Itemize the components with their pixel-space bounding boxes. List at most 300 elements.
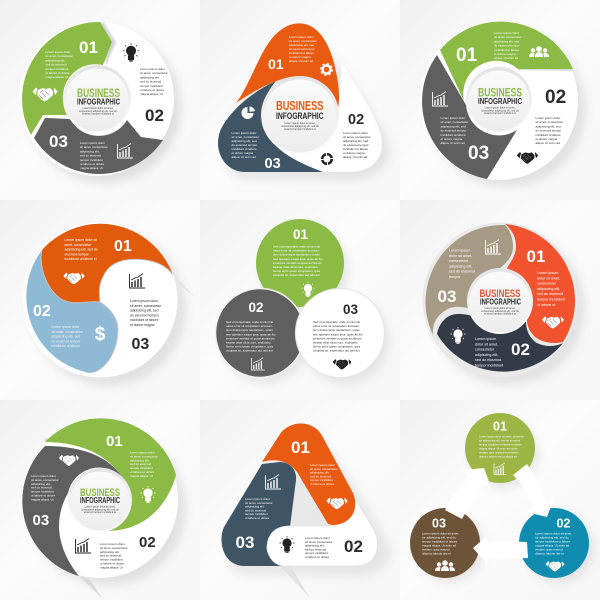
icon: chart	[266, 474, 281, 489]
03: 03	[264, 156, 281, 172]
icon: dollar: $	[95, 324, 106, 345]
text 02: do eiusmod tempor	[536, 129, 561, 133]
text 01: tempor incididunt	[130, 466, 153, 470]
text 03: sed do eiusmod	[449, 270, 475, 274]
text 02: magna aliqua. Ut enim ad	[535, 544, 570, 548]
text 02: Lorem ipsum dolor	[305, 536, 330, 540]
text 02: Lorem ipsum dolor sit amet,	[535, 532, 572, 536]
panel: swirl orange blue	[22, 222, 196, 386]
segment 03 navy	[218, 81, 323, 172]
text 02: tempor incididunt	[305, 551, 328, 555]
text 01: incididunt ut labore et	[64, 257, 97, 261]
text 02: voluptas sit, aspernatur aut odit aut	[226, 349, 273, 353]
segment 02 blue	[26, 250, 118, 373]
panel: rounded triangle orange navy	[218, 23, 390, 180]
text 02: tempor incididunt ut labore	[535, 540, 571, 544]
center title: eiusmod tempor incididunt ut	[484, 313, 516, 316]
text 01: do eiusmod tempor	[289, 47, 315, 51]
text 03: do eiusmod tempor	[130, 313, 160, 317]
text 02: Lorem ipsum	[475, 337, 496, 341]
01: 01	[526, 247, 545, 266]
text 01: consectetur	[537, 282, 557, 286]
circle 03 white	[296, 288, 384, 378]
center title: BUSINESS	[478, 88, 522, 100]
text 02: Lorem ipsum dolor	[140, 67, 165, 71]
text 03: Lorem ipsum dolor	[130, 299, 159, 303]
text 02: do eiusmod tempor	[343, 143, 369, 147]
text 02: sit amet, consectetur	[52, 330, 84, 334]
text 03: adipisicing elit,	[80, 149, 100, 153]
02: 02	[556, 516, 570, 530]
text 02: tempor incididunt	[140, 84, 163, 88]
icon: chart	[252, 358, 265, 370]
text 01: do eiusmod tempor	[494, 44, 520, 48]
center title: Lorem ipsum dolor sit amet,	[85, 506, 116, 508]
segment 03 navy	[222, 462, 296, 566]
icon: handshake	[542, 316, 564, 329]
03: 03	[236, 533, 254, 552]
icon: handshake	[326, 497, 348, 509]
arrow: 03 to 01	[445, 468, 492, 519]
panel: three circles with arrows	[410, 413, 594, 583]
text 02: Lorem ipsum dolor	[343, 131, 368, 135]
text 01: sit amet, consectetur	[310, 467, 338, 471]
center title: INFOGRAPHIC	[276, 111, 324, 121]
text 01: ut labore et dolore	[130, 470, 155, 474]
text 03: ut labore et dolore	[245, 516, 270, 520]
text 01: inventore veritatis et quasi architecto	[273, 261, 322, 265]
text 01: adipisicing elit,	[310, 471, 330, 475]
circle 01 green	[256, 219, 344, 307]
icon: pie	[242, 106, 255, 119]
icon: bulb	[140, 486, 156, 503]
text 03: tur adipisicing elit, sed do	[422, 536, 456, 540]
center circle	[261, 76, 339, 154]
text 01: sit amet, consectetur	[494, 35, 522, 39]
circle 02 blue	[519, 508, 589, 578]
text 03: adipiscing elit,	[449, 264, 472, 268]
text 03: et dolore magna	[440, 137, 463, 141]
text 01: tempor incididunt	[46, 67, 69, 71]
text 01: ut labore et dolore	[310, 482, 335, 486]
text 01: Lorem ipsum dolor	[310, 463, 335, 467]
text 02: beatae vitae dicta sunt, explicabo.	[226, 340, 271, 344]
segment 03 grey	[422, 55, 517, 179]
text 02: tur adipisicing elit, sed do	[535, 536, 569, 540]
text 01: Lorem ipsum dolor	[46, 50, 70, 54]
02: 02	[139, 534, 156, 551]
center title: INFOGRAPHIC	[480, 296, 521, 306]
text 02: sit amet, consectetur	[536, 120, 563, 124]
text 01: Lorem ipsum	[537, 271, 558, 275]
text 03: sit amet, consectetur	[245, 501, 273, 505]
arrow: 01 to 02	[513, 464, 554, 517]
text 02: tempor incididunt	[475, 364, 503, 368]
text 03: Lorem ipsum dolor	[31, 474, 56, 478]
text 02: sed do eiusmod	[100, 554, 122, 558]
text 02: do eiusmod tempor	[52, 339, 81, 343]
text 01: sit amet, consectetur	[289, 39, 317, 43]
text 03: magna aliqua. Ut enim ad	[422, 544, 457, 548]
icon: handshake	[546, 561, 564, 572]
text 01: tium doloremque laudantium, totam	[273, 253, 321, 257]
text 01: incididunt ut labore	[289, 51, 315, 55]
text 02: adipisicing elit,	[305, 544, 325, 548]
text 02: Lorem ipsum dolor	[536, 116, 560, 120]
center circle	[63, 65, 131, 133]
text 03: Lorem ipsum	[449, 248, 470, 252]
01: 01	[79, 38, 98, 57]
text 01: eiusmod tempor	[64, 252, 90, 256]
text 03: Lorem ipsum dolor	[80, 141, 105, 145]
segment 01 green	[22, 22, 112, 135]
text 03: inventore veritatis et quasi architecto	[313, 336, 362, 340]
text 03: natus error sit voluptatem accusan-	[313, 324, 360, 328]
text 01: ut labore et dolore	[46, 71, 70, 75]
circle 02 grey	[216, 288, 304, 378]
center title: consectetur adipiscing elit, sed do	[281, 125, 319, 128]
text 01: Lorem ipsum dolor sit	[64, 238, 97, 242]
text 02: natus error sit voluptatem accusan-	[226, 324, 273, 328]
icon: chart	[494, 463, 506, 475]
text 02: adipiscing elit,	[475, 353, 498, 357]
02: 02	[33, 303, 51, 320]
01: 01	[493, 420, 507, 434]
text 03: adipisicing elit, sed	[232, 139, 257, 143]
text 02: Nemo enim ipsam voluptatem, quia	[226, 345, 273, 349]
text 03: rem aperiam eaque ipsa, quae ab illo	[313, 332, 363, 336]
text 03: adipisicing elit, sed	[440, 124, 466, 128]
02: 02	[344, 537, 363, 556]
02: 02	[348, 112, 364, 128]
panel: circle waves red tan dark	[422, 222, 585, 385]
center title	[478, 88, 522, 115]
text 03: tempor incididunt ut labore	[422, 540, 458, 544]
icon: chart	[432, 92, 448, 106]
text 02: adipisicing elit, sed	[343, 139, 369, 143]
text 03: dolor sit amet,	[449, 254, 472, 258]
center title: BUSINESS	[276, 99, 324, 113]
text 02: incididunt ut labore	[343, 147, 369, 151]
segment 01 orange	[262, 424, 355, 525]
text 02: ut labore et dolore	[305, 555, 330, 559]
text 01: sed do eiusmod	[310, 474, 332, 478]
text 01: dolor sit amet,	[537, 276, 560, 280]
02: 02	[511, 340, 530, 359]
text 03: sit amet, consectetur	[440, 120, 468, 124]
center title: consectetur adipiscing elit, sed do	[79, 110, 117, 113]
segment 02 white	[275, 63, 382, 172]
text 03: incididunt ut labore	[130, 318, 159, 322]
text 03: Nemo enim ipsam voluptatem, quia	[313, 345, 360, 349]
text 02: sed do eiusmod	[475, 358, 501, 362]
01: 01	[291, 438, 310, 457]
center title: Lorem ipsum dolor sit amet,	[485, 106, 516, 110]
icon: bulb	[301, 282, 315, 297]
text 02: sed do eiusmod	[305, 547, 327, 551]
icon: people	[435, 560, 455, 571]
text 03: beatae vitae dicta sunt, explicabo.	[313, 340, 358, 344]
text 03: veniam, quis nostrud	[422, 548, 450, 552]
text 03: do eiusmod tempor	[232, 143, 257, 147]
icon: handshake	[333, 359, 351, 370]
center title	[480, 288, 521, 316]
panel: circle blades green grey	[420, 22, 586, 187]
text 03: Lorem ipsum dolor	[440, 116, 465, 120]
text 02: Lorem ipsum dolor	[52, 325, 80, 329]
text 02: sit amet, consectetur	[343, 135, 371, 139]
text 03: tempor	[449, 275, 461, 279]
circle 03 brown	[410, 508, 480, 578]
center title	[276, 99, 324, 131]
icon: chart	[76, 538, 91, 553]
text 03: voluptas sit, aspernatur aut odit aut	[313, 349, 360, 353]
segment 02 dark	[437, 314, 563, 372]
text 03: incididunt ut labore	[232, 147, 257, 151]
text 01: sed do eiusmod	[130, 462, 152, 466]
03: 03	[49, 132, 68, 151]
segment 01 orange	[236, 23, 339, 108]
segment 01 green	[45, 418, 176, 531]
text 01: aliqua. Ut enim ad	[289, 59, 314, 63]
text 03: incididunt ut labore	[440, 133, 466, 137]
text 03: Lorem ipsum dolor	[232, 131, 256, 135]
text 02: sit amet, consectetur	[140, 71, 168, 75]
text 02: adipisicing elit,	[140, 75, 160, 79]
center circle	[466, 67, 532, 133]
text 03: do eiusmod tempor	[440, 129, 466, 133]
icon: bulb	[450, 327, 466, 344]
text 03: magna aliqua. Ut	[31, 497, 54, 501]
icon: handshake	[63, 272, 85, 284]
text 01: Lorem ipsum dolor sit amet, consecte-	[479, 434, 525, 438]
text 03: aliqua. Ut enim ad	[440, 141, 465, 145]
text 01: tempor incididunt	[537, 298, 565, 302]
text 01: tempor incididunt	[310, 478, 333, 482]
icon: bulb	[280, 536, 294, 553]
text 01: adipisicing elit, sed	[289, 43, 315, 47]
text 01: sit amet, consectetur	[46, 54, 73, 58]
text 03: adipisicing elit,	[31, 482, 51, 486]
center title: eiusmod tempor incididunt ut	[84, 511, 116, 514]
text 01: et dolore magna	[289, 55, 311, 59]
text 02: sit amet, consectetur	[305, 540, 333, 544]
text 01: ullamco laboris nisi ut aliquip ex	[479, 454, 517, 458]
text 02: adipisicing elit, sed	[536, 124, 561, 128]
text 01: Lorem ipsum dolor	[494, 31, 519, 35]
text 03: ullamco laboris nisi ut	[422, 552, 451, 556]
text 02: aliqua. Ut enim ad	[343, 155, 368, 159]
text 03: aliqua. Ut enim ad	[232, 155, 256, 159]
text 03: magna aliqua. Ut	[80, 166, 103, 170]
text 02: aliqua. Ut enim ad	[536, 141, 560, 145]
03: 03	[32, 512, 49, 529]
center title	[77, 88, 120, 116]
panel: triangle bands orange navy	[222, 424, 391, 598]
text 03: et dolore magna	[232, 151, 254, 155]
02: 02	[248, 300, 264, 315]
text 02: dolor sit amet,	[475, 342, 498, 346]
icon: people	[529, 46, 549, 57]
text 03: sed do eiusmod	[31, 486, 53, 490]
02: 02	[145, 106, 164, 125]
center title: Lorem ipsum dolor sit amet,	[485, 307, 516, 310]
center title: consectetur adipiscing elit, sed do	[81, 508, 119, 511]
text 03: adipisicing elit,	[245, 505, 265, 509]
text 03: ut labore et dolore	[31, 494, 56, 498]
text 02: magna aliqua. Ut	[100, 565, 123, 569]
text 03: consectetur	[449, 259, 469, 263]
center circle	[68, 468, 132, 532]
03: 03	[432, 516, 446, 530]
text 01: et dolore magna	[494, 52, 516, 56]
text 01: Lorem ipsum dolor	[130, 450, 155, 454]
01: 01	[293, 227, 309, 242]
arrow: 02 to 03	[473, 536, 528, 564]
segment 01 red	[505, 224, 575, 343]
center title: consectetur adipiscing elit, sed do	[481, 109, 519, 112]
01: 01	[114, 238, 132, 255]
circle 01 green	[465, 413, 535, 483]
text 01: Sed ut perspiciatis, unde omnis iste	[273, 244, 321, 248]
text 01: sed do eiusmod	[537, 292, 563, 296]
center title: BUSINESS	[80, 487, 120, 499]
segment 02 white	[267, 497, 377, 566]
text 01: adipisicing elit, sed do	[64, 248, 98, 252]
text 01: sed do eiusmod	[46, 63, 67, 67]
text 02: rem aperiam eaque ipsa, quae ab illo	[226, 332, 276, 336]
text 03: sed do eiusmod	[80, 154, 102, 158]
panel: spiral green grey	[22, 418, 186, 598]
text 01: natus error sit voluptatem accusan-	[273, 249, 320, 253]
icon: bulb	[123, 43, 139, 62]
center title: Lorem ipsum dolor sit amet,	[285, 122, 316, 125]
center title: BUSINESS	[77, 88, 120, 100]
center title: Lorem ipsum dolor sit amet,	[83, 107, 114, 110]
text 01: magna aliqua. Ut	[130, 474, 153, 478]
01: 01	[106, 433, 123, 450]
text 03: sit amet, consectetur	[31, 478, 59, 482]
03: 03	[132, 336, 149, 353]
text 02: sit amet, consectetur	[100, 546, 128, 550]
text 01: rem aperiam eaque ipsa, quae ab illo	[273, 257, 323, 261]
center title: eiusmod tempor incididunt ut	[82, 113, 114, 116]
text 03: adipisicing elit, sed	[130, 309, 159, 313]
center title: INFOGRAPHIC	[77, 96, 120, 106]
text 03: sit amet, consectetur	[130, 304, 162, 308]
text 03: tempor incididunt	[245, 512, 268, 516]
text 02: ullamco laboris nisi ut	[535, 552, 564, 556]
03: 03	[343, 302, 359, 317]
text 01: adipisicing elit,	[130, 458, 150, 462]
text 02: consectetur	[475, 348, 495, 352]
text 02: sed do eiusmod	[140, 80, 162, 84]
icon: chart	[486, 240, 501, 254]
text 02: incididunt ut labore	[52, 344, 80, 348]
text 01: magna aliqua. Ut	[46, 75, 68, 79]
text 03: ut labore et dolore	[80, 162, 105, 166]
text 01: voluptas sit, aspernatur aut odit aut	[273, 273, 320, 277]
text 01: ut labore et	[537, 303, 555, 307]
center title: INFOGRAPHIC	[478, 96, 522, 106]
text 03: sit amet, consectetur	[80, 145, 108, 149]
center title: BUSINESS	[480, 288, 520, 300]
segment 03 tan	[426, 225, 513, 335]
icon: handshake	[32, 88, 58, 102]
text 01: aliqua. Ut enim ad	[494, 56, 519, 60]
text 02: et dolore magna	[343, 151, 365, 155]
center title: consectetur adipiscing elit, sed do	[481, 310, 519, 313]
01: 01	[268, 56, 284, 72]
text 02: inventore veritatis et quasi architecto	[226, 336, 275, 340]
text 03: Lorem ipsum dolor sit amet,	[422, 532, 459, 536]
03: 03	[468, 143, 489, 164]
panel: circular arrows diagram green grey	[20, 22, 181, 183]
icon: gear	[321, 64, 332, 75]
icon: cycle ring	[322, 154, 332, 164]
text 03: tium doloremque laudantium, totam	[313, 328, 361, 332]
panel: three overlapping circles	[216, 219, 389, 384]
text 02: ut labore et dolore	[100, 562, 125, 566]
text 01: Nemo enim ipsam voluptatem, quia	[273, 269, 320, 273]
03: 03	[438, 287, 456, 306]
segment 01 green	[440, 22, 573, 101]
text 01: Lorem ipsum dolor	[289, 35, 314, 39]
segment 03 grey	[34, 118, 163, 174]
text 01: tempor incididunt ut labore et dolore	[479, 442, 522, 446]
text 01: tur adipisicing elit, sed do eiusmod	[479, 438, 521, 442]
text 02: Lorem ipsum dolor	[100, 542, 125, 546]
center title: eiusmod tempor incididunt ut	[284, 128, 316, 131]
text 01: adipiscing elit,	[537, 287, 560, 291]
text 02: et dolore magna	[536, 137, 558, 141]
text 01: amet, consectetur	[64, 243, 92, 247]
text 02: incididunt ut labore	[536, 133, 561, 137]
center title	[80, 487, 120, 514]
icon: handshake	[59, 455, 79, 466]
text 02: adipisicing elit, sed	[52, 335, 80, 339]
text 01: adipisicing elit, sed	[494, 39, 520, 43]
text 01: sit amet, consectetur	[130, 454, 158, 458]
text 02: tempor incididunt	[100, 558, 123, 562]
text 03: sit amet, consectetur	[232, 135, 259, 139]
icon: handshake	[517, 152, 538, 164]
center title: INFOGRAPHIC	[80, 496, 120, 505]
text 02: adipisicing elit,	[100, 550, 120, 554]
icon: chart	[118, 144, 133, 158]
text 02: Sed ut perspiciatis, unde omnis iste	[226, 320, 274, 324]
text 01: beatae vitae dicta sunt, explicabo.	[273, 265, 318, 269]
text 03: et dolore magna	[130, 323, 155, 327]
text 03: tempor incididunt	[80, 158, 103, 162]
center title: eiusmod tempor incididunt ut	[484, 112, 516, 115]
text 02: tium doloremque laudantium, totam	[226, 328, 274, 332]
center circle	[467, 268, 533, 334]
text 03: tempor incididunt	[31, 490, 54, 494]
text 01: veniam, quis nostrud exercitation	[479, 450, 519, 454]
text 01: incididunt ut labore	[494, 48, 520, 52]
text 01: adipisicing elit,	[46, 58, 65, 62]
text 03: Lorem ipsum dolor	[245, 497, 270, 501]
icon: chart	[130, 274, 145, 288]
segment 03 grey	[22, 446, 123, 576]
text 02: ut labore et dolore	[140, 88, 165, 92]
01: 01	[456, 45, 478, 66]
02: 02	[545, 87, 566, 108]
text 03: sed do eiusmod	[245, 508, 267, 512]
text 03: Sed ut perspiciatis, unde omnis iste	[313, 320, 361, 324]
text 01: magna aliqua. Ut enim ad minim	[479, 446, 518, 450]
